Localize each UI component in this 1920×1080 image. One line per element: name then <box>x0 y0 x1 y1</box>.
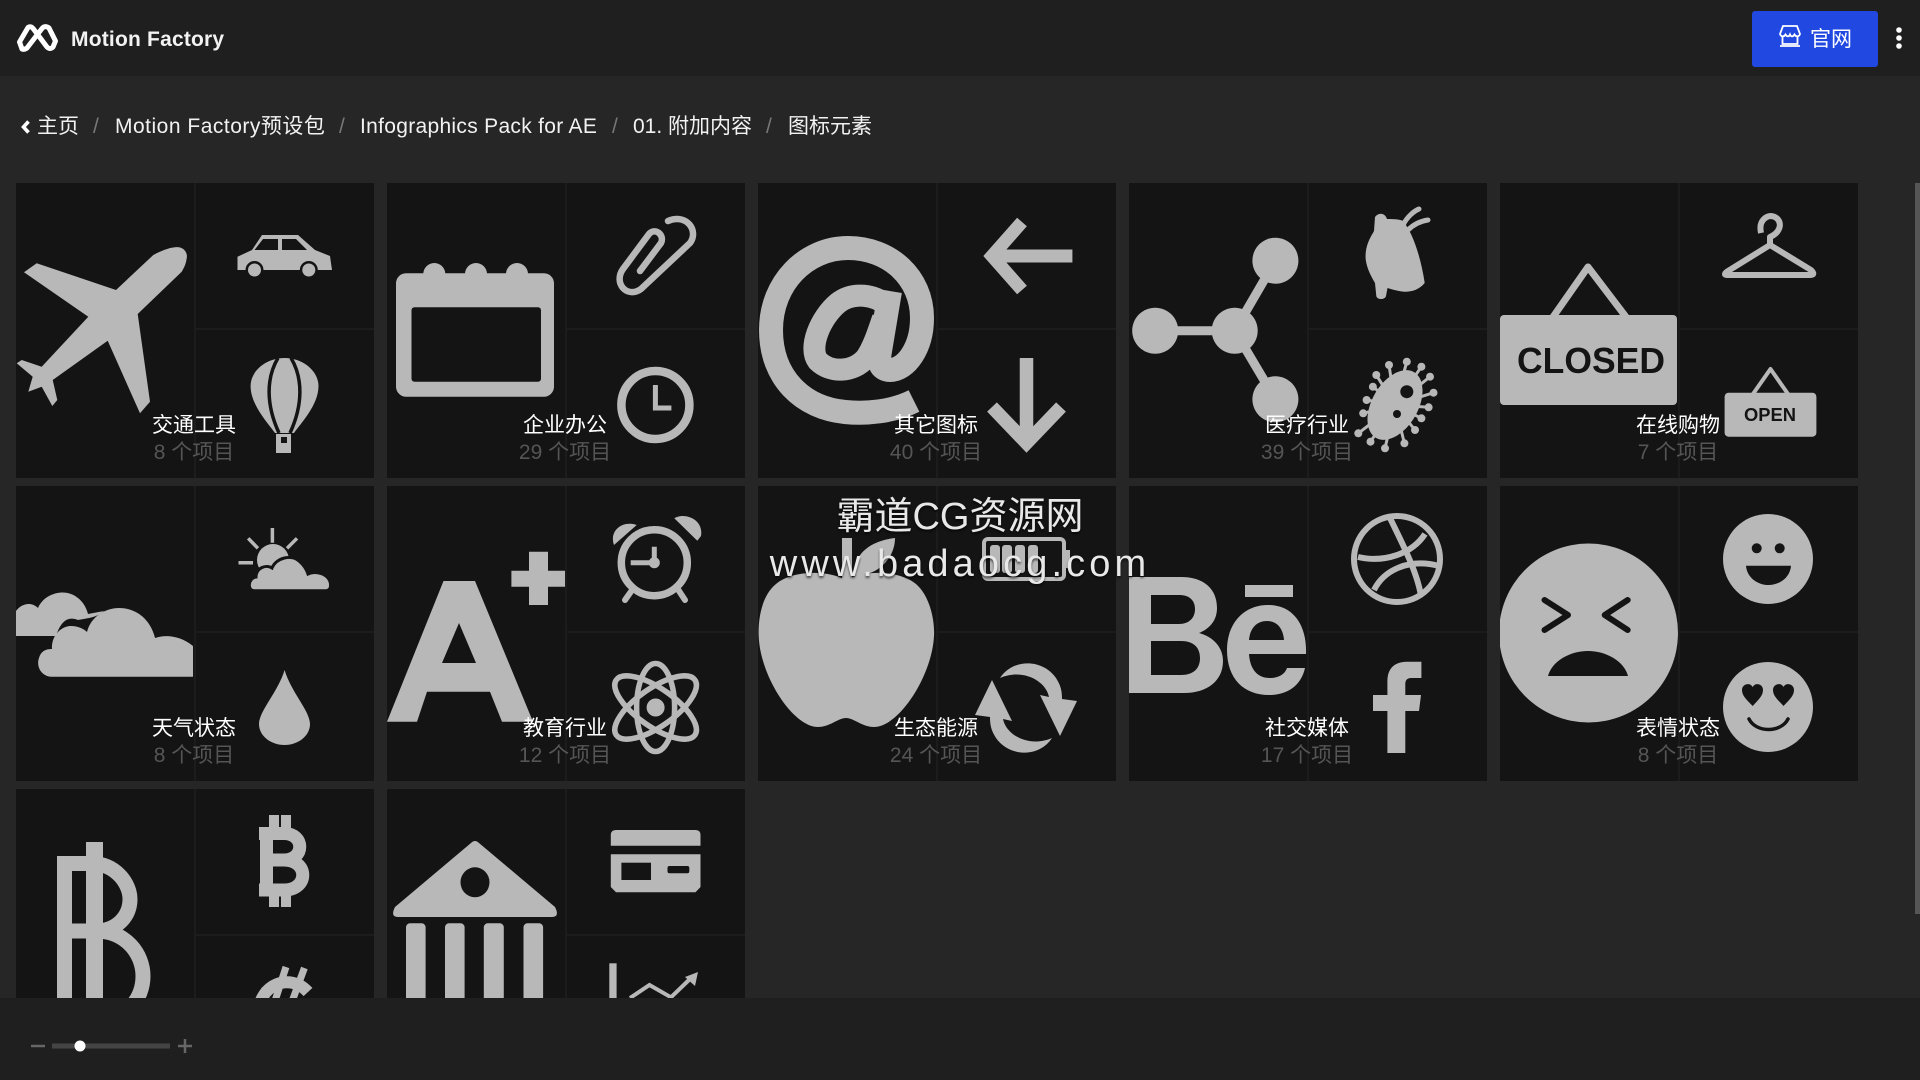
crumb: Infographics Pack for AE: Infographics Pack for AE <box>360 115 597 138</box>
card title: 天气状态 <box>152 717 236 740</box>
breadcrumb: / <box>612 115 618 138</box>
icon: smile face <box>1723 514 1813 604</box>
label <box>1636 717 1720 767</box>
card: 表情状态 <box>1500 486 1858 781</box>
item count: 8 个项目 <box>154 441 234 464</box>
icon: hot air balloon <box>251 358 318 453</box>
button label: 官网 <box>1810 28 1852 51</box>
icon: atom <box>605 664 706 752</box>
icon: back chevron <box>21 120 30 134</box>
item count: 12 个项目 <box>519 744 611 767</box>
icon: closed sign: CLOSED <box>1517 340 1665 381</box>
button: 官网 <box>1752 11 1878 67</box>
icon: dribbble <box>1354 516 1440 602</box>
icon: water drop <box>259 670 310 745</box>
card title: 社交媒体 <box>1265 717 1349 740</box>
zoom slider <box>31 1039 192 1053</box>
icon: recycle arrows <box>975 663 1077 753</box>
icon: car <box>238 235 332 279</box>
label <box>1636 414 1720 464</box>
card title: 在线购物 <box>1636 414 1720 437</box>
icon: behance <box>1129 577 1306 695</box>
label <box>890 414 982 464</box>
icons: emoji <box>1500 514 1813 752</box>
brand name: Motion Factory <box>71 28 224 51</box>
label <box>519 716 611 767</box>
label <box>890 717 982 767</box>
crumb: 主页: 主页 <box>37 115 79 138</box>
card title: 其它图标 <box>894 414 978 437</box>
icons: currency <box>57 815 312 998</box>
crumb: 01. 附加内容: 01. 附加内容 <box>633 115 752 138</box>
watermark <box>770 496 1150 586</box>
card title: 表情状态 <box>1636 717 1720 740</box>
label <box>1261 414 1353 464</box>
slider thumb <box>74 1040 86 1052</box>
crumb: Motion Factory预设包: Motion Factory预设包 <box>115 115 325 138</box>
item count: 40 个项目 <box>890 441 982 464</box>
icons: office <box>396 216 696 444</box>
card: 社交媒体 <box>1129 486 1487 781</box>
slider track <box>52 1044 170 1048</box>
item count: 8 个项目 <box>1638 744 1718 767</box>
icon: heart organ <box>1366 209 1428 299</box>
icon: bacteria <box>1354 358 1438 452</box>
top navigation bar <box>0 0 1920 76</box>
icons: weather <box>16 528 330 745</box>
icon: facebook f <box>1373 662 1421 753</box>
icon: calendar <box>396 263 554 397</box>
crumb: 图标元素: 图标元素 <box>788 115 872 138</box>
icon: sun and cloud <box>238 528 331 591</box>
icons: other <box>759 218 1072 453</box>
icon: arrow down <box>992 358 1061 443</box>
icon: open sign: OPEN <box>1744 405 1796 425</box>
card: 天气状态 <box>16 486 374 781</box>
item count: 8 个项目 <box>154 744 234 767</box>
icons: transport <box>16 235 332 453</box>
icons: education <box>387 516 702 754</box>
item count: 39 个项目 <box>1261 441 1353 464</box>
breadcrumb: / <box>766 115 772 138</box>
icon: battery <box>984 539 1070 579</box>
item count: 24 个项目 <box>890 744 982 767</box>
icon: baht sign <box>57 842 143 1032</box>
icon: at sign <box>771 248 922 413</box>
card: 生态能源 <box>758 486 1116 781</box>
icon: credit card <box>611 830 700 892</box>
card: finance (partly hidden) <box>387 789 745 1080</box>
icon: more menu <box>1896 27 1902 49</box>
icon: plane <box>17 247 187 413</box>
card: 交通工具 <box>16 183 374 478</box>
breadcrumb: / <box>93 115 99 138</box>
label <box>519 414 611 464</box>
card title: 生态能源 <box>894 717 978 740</box>
watermark line 2: www.badaocg.com <box>770 543 1150 585</box>
icon: closed sign <box>1500 267 1677 405</box>
icon: apple <box>759 538 934 727</box>
card: 医疗行业 <box>1129 183 1487 478</box>
item count: 29 个项目 <box>519 441 611 464</box>
icon: A plus <box>387 552 565 722</box>
icon: arrow left <box>992 222 1072 290</box>
icon: paperclip <box>620 219 693 292</box>
icon: share nodes <box>1132 238 1298 422</box>
card title: 企业办公 <box>523 414 607 437</box>
label <box>1261 716 1353 767</box>
card: 教育行业 <box>387 486 745 781</box>
icons: medical <box>1132 206 1438 452</box>
icons: ecology <box>758 537 1077 753</box>
icon: shop <box>1779 25 1801 47</box>
card: 在线购物 <box>1500 183 1858 478</box>
icon: hanger <box>1725 216 1813 275</box>
icon: Motion Factory logo <box>16 24 58 52</box>
label <box>152 414 236 464</box>
icons: social <box>1129 513 1443 753</box>
icon: upset face <box>1499 544 1678 722</box>
icon: clouds <box>16 593 193 677</box>
icon: open sign <box>1725 369 1816 437</box>
watermark line 1: 霸道CG资源网 <box>836 496 1084 538</box>
card title: 交通工具 <box>152 414 236 437</box>
card: 其它图标 <box>758 183 1116 478</box>
card: currency (partly hidden) <box>16 789 374 1080</box>
icon: growth chart <box>609 963 698 1013</box>
bottom bar <box>0 998 1920 1080</box>
icons: shopping <box>1500 213 1816 437</box>
breadcrumb: / <box>339 115 345 138</box>
icon: heart eyes face <box>1723 662 1813 752</box>
icon: bank <box>393 841 557 1023</box>
icon: minus <box>31 1045 45 1047</box>
item count: 7 个项目 <box>1638 441 1718 464</box>
icon: bitcoin <box>259 815 303 907</box>
card title: 教育行业 <box>523 717 607 740</box>
icon: plus <box>178 1039 192 1053</box>
card: 企业办公 <box>387 183 745 478</box>
item count: 17 个项目 <box>1261 744 1353 767</box>
label <box>152 717 236 767</box>
icon: alarm clock <box>613 516 701 600</box>
card title: 医疗行业 <box>1265 414 1349 437</box>
scrollbar <box>1915 183 1920 914</box>
icon: colon currency <box>258 967 308 1019</box>
icon: clock <box>621 371 689 439</box>
icons: finance <box>393 830 700 998</box>
breadcrumb <box>21 115 872 138</box>
